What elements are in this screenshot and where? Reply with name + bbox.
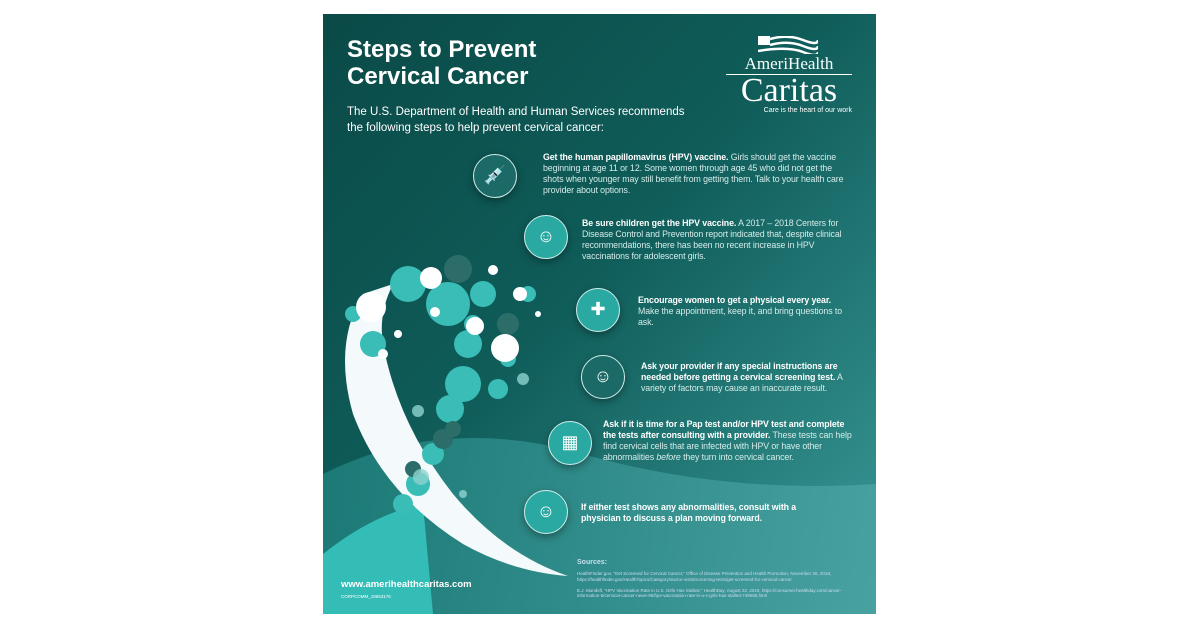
icon: syringe: 💉 xyxy=(484,165,506,185)
logo: Caritas xyxy=(741,72,837,109)
logo: AmeriHealth xyxy=(745,54,833,73)
logo xyxy=(726,36,852,114)
sources: Sources: xyxy=(577,559,607,566)
title: Cervical Cancer xyxy=(347,63,528,90)
icon: calendar: ▦ xyxy=(561,432,578,452)
intro text: the following steps to help prevent cervical cancer: xyxy=(347,122,604,134)
icon: physician xyxy=(524,490,568,534)
title xyxy=(347,36,536,90)
sources: HealthFinder.gov, "Get Screened for Cervical Cancer," Office of Disease Prevention and Health Promotion, November 30, 2018, https://healthfinder.gov/HealthTopics/Category/doctor-visits/screening-tests/get-screened-for-cervical-cancer xyxy=(577,571,831,582)
step 6: If either test shows any abnormalities, consult with a physician to discuss a plan moving forward. xyxy=(581,502,796,523)
icon: doctor xyxy=(581,355,625,399)
website: CORPCOMM_19653176 xyxy=(341,594,391,599)
step 3: Encourage women to get a physical every year. Make the appointment, keep it, and bring questions to ask. xyxy=(638,295,842,327)
website xyxy=(341,579,472,599)
step 2: Be sure children get the HPV vaccine. A 2017 – 2018 Centers for Disease Control and Prevention report indicated that, despite clinical recommendations, there has been no recent increase in HPV vaccinations for adolescent girls. xyxy=(582,218,842,261)
icon: calendar xyxy=(548,421,592,465)
website: www.amerihealthcaritas.com xyxy=(341,579,472,590)
step 4: Ask your provider if any special instructions are needed before getting a cervical screening test. A variety of factors may cause an inaccurate result. xyxy=(641,361,842,393)
icon: girl xyxy=(524,215,568,259)
sources xyxy=(577,559,842,598)
icon: doctor: ☺ xyxy=(594,366,612,386)
title: Steps to Prevent xyxy=(347,36,536,63)
panel: background xyxy=(323,14,876,614)
intro text xyxy=(347,106,684,134)
icon: medkit: ✚ xyxy=(590,299,606,319)
step 5: Ask if it is time for a Pap test and/or HPV test and complete the tests after consulting with a provider. These tests can help find cervical cells that are infected with HPV or have other abnormalities before they turn into cervical cancer. xyxy=(603,419,852,462)
icon: syringe xyxy=(473,154,517,198)
intro text: The U.S. Department of Health and Human Services recommends xyxy=(347,106,684,118)
icon: girl: ☺ xyxy=(537,226,555,246)
logo: Care is the heart of our work xyxy=(764,107,852,114)
icon: medkit xyxy=(576,288,620,332)
step 1: Get the human papillomavirus (HPV) vaccine. Girls should get the vaccine beginning at age 11 or 12. Some women through age 45 who did not get the shots when younger may still benefit from getting them. Talk to your health care provider about options. xyxy=(543,152,843,195)
icon: physician: ☺ xyxy=(537,501,555,521)
sources: E.J. Mundell, "HPV Vaccination Rate in U.S. Girls Has Stalled," HealthDay, August 22, 2019, https://consumer.healthday.com/cancer-information-5/cervical-cancer-news-95/hpv-vaccination-rate-in-u-s-girls-has-stalled-749585.html xyxy=(577,588,841,598)
ribbon xyxy=(345,284,568,576)
